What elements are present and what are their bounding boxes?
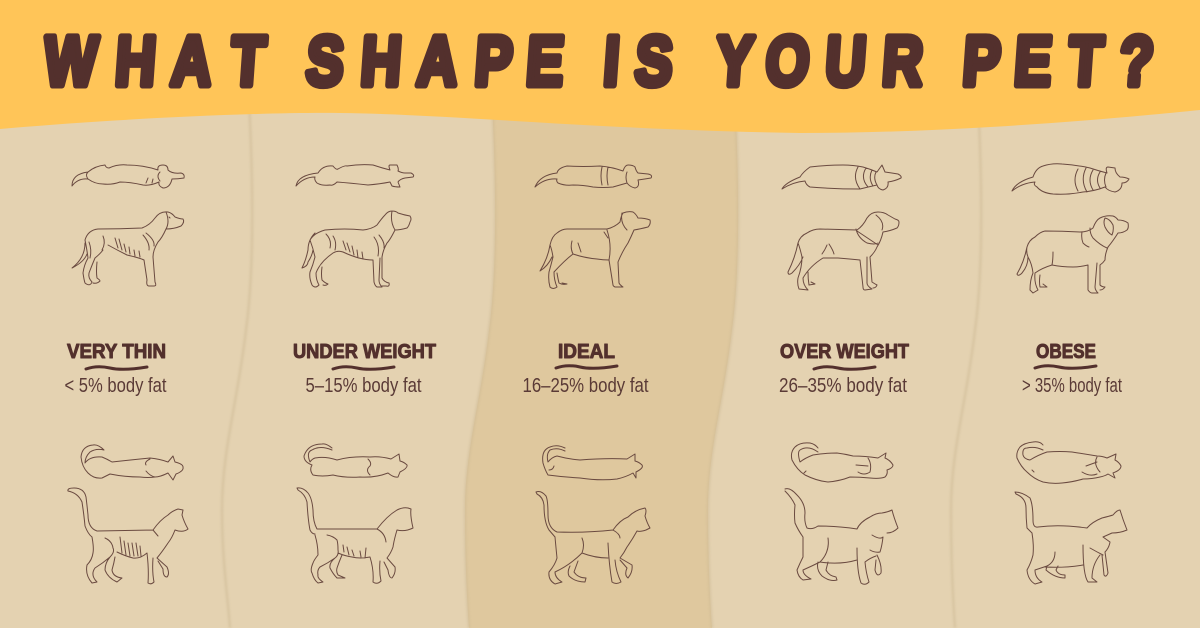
dog side view: obese: [1017, 216, 1128, 293]
cat top view: under weight: [304, 444, 407, 477]
body fat: over weight: 26–35% body fat: [779, 375, 907, 397]
body fat: obese: > 35% body fat: [1022, 375, 1122, 397]
label: over weight: OVER WEIGHT: [780, 341, 909, 363]
panel: very thin: [68, 165, 188, 584]
cat top view: over weight: [791, 443, 893, 482]
body fat: very thin: < 5% body fat: [64, 375, 167, 397]
column edge shadows: [222, 100, 981, 628]
dog top view: very thin: [72, 165, 184, 188]
dog top view: over weight: [782, 165, 901, 190]
header banner: [0, 0, 1200, 133]
title: WHAT SHAPE IS YOUR PET?: [42, 23, 1156, 100]
label: under weight: UNDER WEIGHT: [293, 341, 436, 363]
underline: [333, 367, 394, 369]
underline: [556, 366, 617, 368]
body fat: ideal: 16–25% body fat: [522, 375, 649, 397]
dog side view: ideal: [540, 212, 650, 288]
cat top view: ideal: [543, 446, 642, 480]
dog top view: obese: [1012, 164, 1129, 194]
dog top view: under weight: [296, 165, 414, 187]
cat side view: over weight: [785, 489, 898, 584]
dog top view: ideal: [535, 165, 652, 188]
cat side view: ideal: [536, 492, 650, 584]
label: ideal: IDEAL: [558, 341, 615, 363]
label: very thin: VERY THIN: [67, 341, 166, 363]
panel: obese: [1012, 164, 1129, 584]
cat side view: very thin: [68, 488, 188, 584]
underline: [86, 367, 147, 369]
underline: [814, 367, 875, 369]
dog side view: over weight: [788, 212, 899, 290]
cat side view: obese: [1015, 492, 1127, 584]
dog side view: under weight: [302, 211, 411, 287]
label: obese: OBESE: [1036, 341, 1096, 363]
underline: [1035, 366, 1096, 368]
panel: highlighted ideal column: [465, 100, 738, 628]
cat side view: under weight: [297, 488, 413, 583]
panel: ideal: [535, 165, 652, 584]
cat top view: obese: [1017, 442, 1121, 483]
body fat: under weight: 5–15% body fat: [306, 375, 422, 397]
panel: over weight: [782, 165, 901, 584]
cat top view: very thin: [81, 445, 183, 480]
panel: under weight: [296, 165, 414, 583]
dog side view: very thin: [72, 212, 184, 286]
